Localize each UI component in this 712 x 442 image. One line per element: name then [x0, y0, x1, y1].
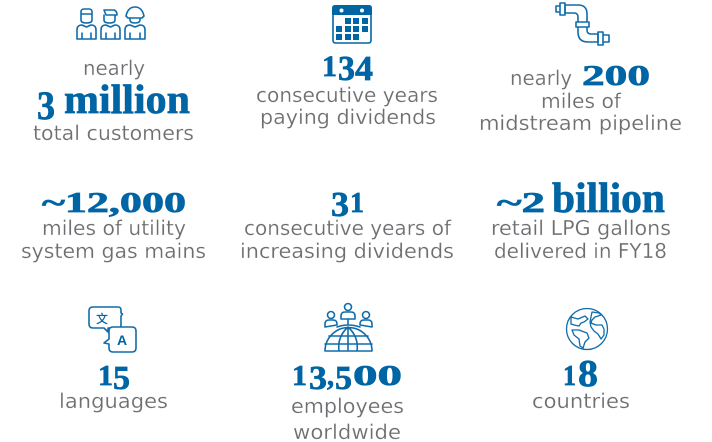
stat: total customers: [33, 7, 194, 145]
value: 3: [331, 185, 349, 224]
value: [292, 360, 402, 397]
value: 5: [113, 360, 130, 397]
value: [98, 360, 130, 397]
caption line 1: miles of utility: [42, 216, 186, 240]
stat: utility gas mains: [21, 187, 206, 263]
icon: translation bubbles: 文: [96, 310, 108, 327]
value: 3: [309, 360, 327, 397]
icon: pipe: [556, 3, 609, 45]
value: 1: [292, 360, 307, 392]
value: 1: [322, 50, 337, 83]
icon: globe: [566, 308, 608, 350]
label: nearly: [510, 66, 572, 90]
value: ~2: [497, 187, 545, 219]
caption line 1: retail LPG gallons: [491, 216, 671, 240]
value: 200: [582, 60, 650, 92]
stat: retail LPG gallons: [491, 176, 671, 263]
icon: translation bubbles: A: [117, 332, 127, 348]
caption line 2: midstream pipeline: [479, 111, 682, 135]
caption line 1: consecutive years: [256, 83, 438, 107]
stat: midstream pipeline: [479, 3, 682, 135]
label: nearly: [83, 56, 145, 80]
caption line 1: consecutive years of: [244, 216, 452, 240]
stat: increasing dividends: [240, 185, 454, 263]
caption: total customers: [33, 121, 194, 145]
caption: languages: [59, 389, 168, 413]
value: ~12,000: [42, 187, 186, 219]
caption: countries: [532, 389, 630, 413]
caption line 2: paying dividends: [260, 105, 436, 129]
value: [497, 176, 665, 222]
value: 3: [37, 83, 55, 128]
value: billion: [552, 176, 665, 222]
value: 1: [98, 360, 113, 392]
caption line 2: system gas mains: [21, 239, 206, 263]
value: [563, 353, 598, 395]
stat: employees worldwide: [291, 304, 404, 442]
value: ,: [327, 360, 334, 392]
value: 3: [338, 49, 355, 88]
caption line 1: employees: [291, 394, 404, 418]
value: 5: [335, 360, 352, 397]
value: 1: [350, 188, 364, 219]
value: [322, 49, 373, 88]
caption line 2: increasing dividends: [240, 239, 454, 263]
value: 4: [355, 49, 373, 88]
stat: countries: [532, 308, 630, 413]
value: 1: [563, 360, 576, 392]
value: 8: [578, 353, 598, 395]
caption line 1: miles of: [541, 89, 622, 113]
icon: translation bubbles: [89, 307, 136, 352]
icon: calendar: [332, 5, 372, 43]
value: million: [64, 76, 190, 122]
value: 00: [353, 360, 402, 392]
icon: people over globe: [325, 304, 372, 351]
stat: languages: [59, 307, 168, 413]
stat: consecutive years paying dividends: [256, 5, 438, 129]
value: [331, 185, 364, 224]
icon: three workers: [77, 7, 145, 39]
caption line 2: delivered in FY18: [494, 239, 667, 263]
